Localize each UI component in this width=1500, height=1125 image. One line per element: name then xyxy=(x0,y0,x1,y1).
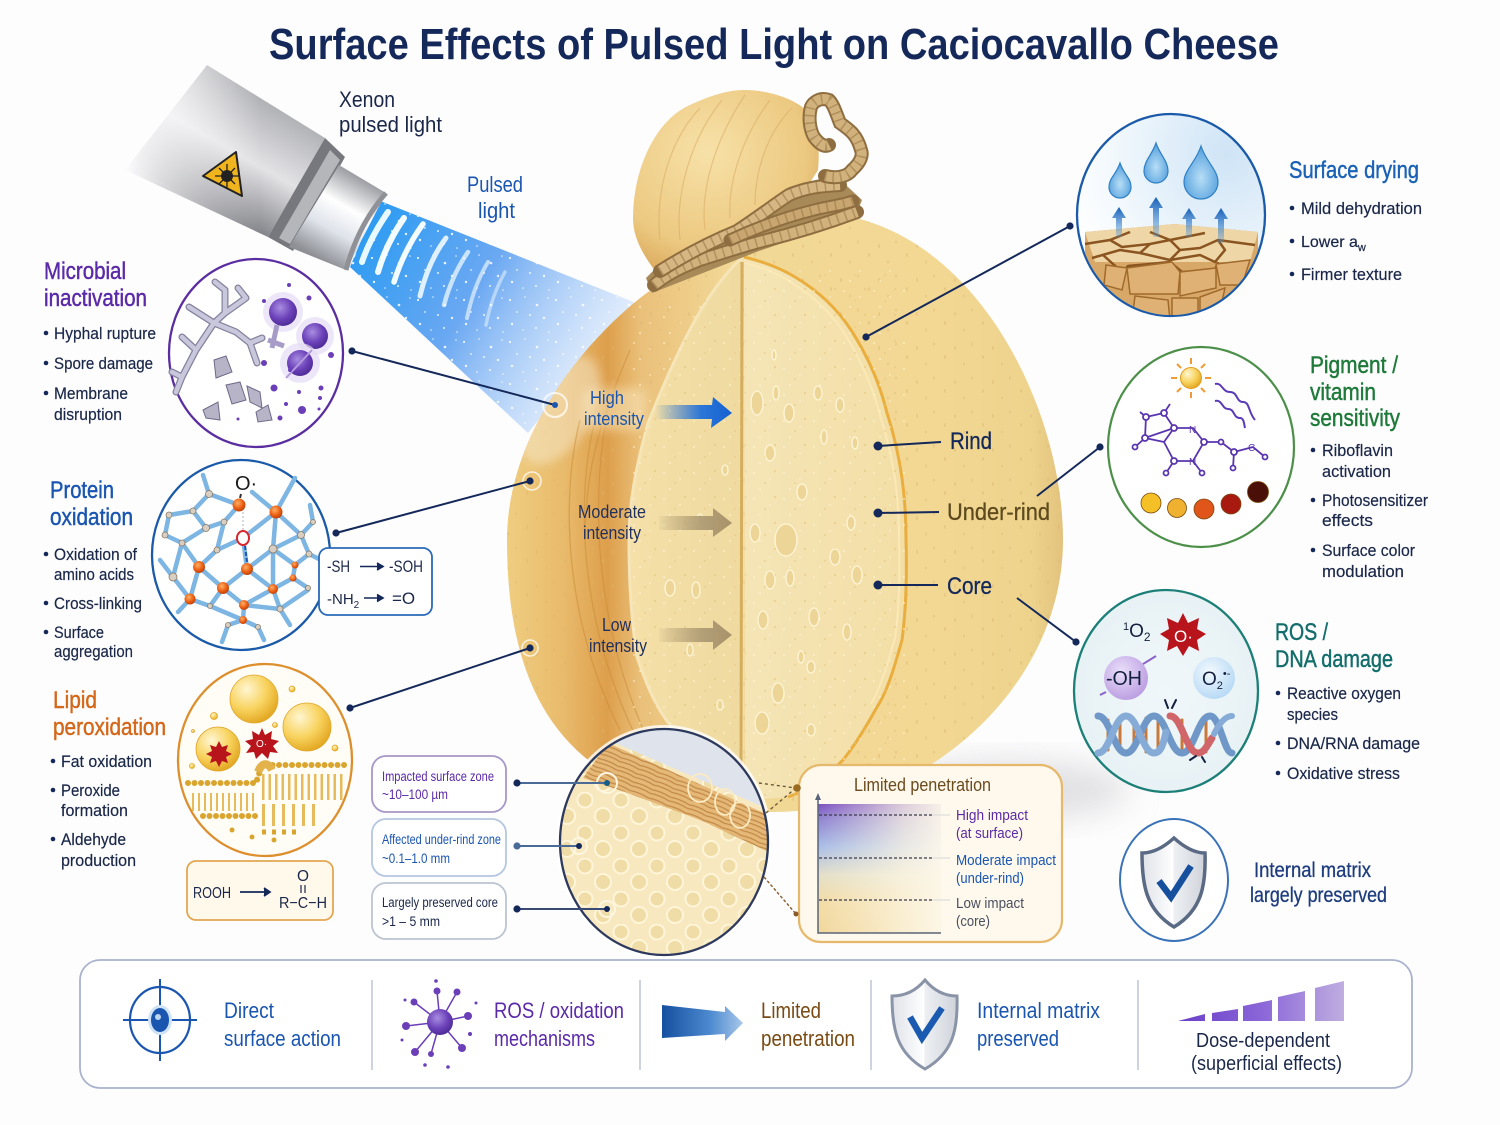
leader line: lipid xyxy=(346,640,538,712)
chemistry box: peroxide to aldehyde: O xyxy=(297,868,309,885)
membrane fragments xyxy=(203,356,272,422)
leader line: surface drying xyxy=(862,222,1074,341)
label: under-rind: Under-rind xyxy=(947,499,1050,526)
panel: lipid peroxidation text: production xyxy=(61,851,136,870)
callout: impacted surface zone: ~10–100 µm xyxy=(382,787,448,802)
panel: lipid peroxidation text: Fat oxidation xyxy=(61,752,152,771)
panel: protein oxidation illustration xyxy=(152,460,330,650)
debris dots xyxy=(236,283,334,420)
panel: ROS and DNA text: Oxidative stress xyxy=(1287,764,1400,783)
singlet oxygen label: 2 xyxy=(1144,630,1151,644)
label: moderate intensity: Moderate xyxy=(578,502,646,522)
label: xenon pulsed light: pulsed light xyxy=(339,112,442,137)
text: ROS oxidation mechanisms: ROS / oxidation xyxy=(494,998,624,1023)
radical star xyxy=(1160,613,1206,656)
chemistry box: thiol and amine: -SH xyxy=(327,557,350,576)
text: limited penetration: penetration xyxy=(761,1026,855,1051)
superoxide: O xyxy=(1202,669,1217,690)
chemistry box: peroxide to aldehyde: R−C−H xyxy=(279,895,327,912)
panel: pigment and vitamin text: Pigment / xyxy=(1310,352,1398,379)
superoxide: •- xyxy=(1223,668,1231,680)
label: internal matrix largely preserved: largely preserved xyxy=(1250,884,1387,907)
text: direct surface action: Direct xyxy=(224,998,274,1023)
panel: microbial inactivation text: Membrane xyxy=(54,384,128,403)
penetration gradient chart xyxy=(815,793,950,933)
summary bar xyxy=(80,960,1412,1088)
text: ROS oxidation mechanisms: mechanisms xyxy=(494,1026,595,1051)
panel: limited penetration xyxy=(799,765,1062,942)
leader line: pigment xyxy=(1037,443,1104,496)
cut face, left xyxy=(629,257,742,790)
label: core xyxy=(874,573,992,600)
caciocavallo cheese xyxy=(500,90,1070,820)
panel: surface drying text: Lower a xyxy=(1301,234,1358,251)
label: xenon pulsed light: Xenon xyxy=(339,87,395,112)
panel: surface drying text: Mild dehydration xyxy=(1301,199,1422,218)
panel: lipid peroxidation text: Peroxide xyxy=(61,781,120,800)
cut face, right xyxy=(744,257,906,800)
zone marker rings xyxy=(571,773,617,917)
lamp body xyxy=(125,65,325,237)
cheese top ball xyxy=(633,90,819,268)
radical stars: O· xyxy=(256,739,267,750)
icon: dose bars xyxy=(1178,981,1344,1021)
label: low intensity: Low xyxy=(602,615,632,635)
lipid bilayer xyxy=(188,764,348,842)
callout: affected under-rind zone xyxy=(372,819,506,876)
panel: pigment and vitamin text: Photosensitizer xyxy=(1322,491,1428,510)
label: moderate intensity xyxy=(578,502,646,543)
oxidised nodes xyxy=(184,498,298,624)
cut seam xyxy=(741,262,742,790)
panel: protein oxidation text xyxy=(44,477,142,661)
rope xyxy=(646,99,862,293)
panel: ROS and DNA text xyxy=(1275,619,1420,783)
text: limited penetration xyxy=(761,998,855,1051)
superoxide xyxy=(1193,657,1235,699)
singlet oxygen label: 1 xyxy=(1123,621,1129,633)
singlet oxygen label: O xyxy=(1129,621,1144,642)
text: direct surface action xyxy=(224,998,341,1051)
label: high intensity: High xyxy=(590,388,624,408)
magnified cross-section lens xyxy=(555,725,775,960)
panel: protein oxidation text: Cross-linking xyxy=(54,594,142,613)
panel: pigment and vitamin text xyxy=(1310,352,1428,581)
text: direct surface action: surface action xyxy=(224,1026,341,1051)
xenon lamp device xyxy=(120,60,386,270)
impact labels: (core) xyxy=(956,914,990,930)
panel: ROS and DNA text: species xyxy=(1287,705,1338,724)
label: internal matrix largely preserved: Internal matrix xyxy=(1254,859,1371,882)
panel: zone callouts xyxy=(372,756,506,939)
label: high intensity: intensity xyxy=(584,409,644,429)
oxygen radical xyxy=(235,473,257,562)
label: under-rind xyxy=(874,499,1050,526)
panel: microbial inactivation text: disruption xyxy=(54,405,122,424)
hydroxyl radical: -OH xyxy=(1106,668,1142,690)
panel: pigment and vitamin text: vitamin xyxy=(1310,379,1376,406)
panel: protein oxidation text: amino acids xyxy=(54,565,134,584)
label: xenon pulsed light xyxy=(339,87,442,137)
icon: penetration arrow xyxy=(662,1005,743,1041)
lamp collar xyxy=(268,138,345,251)
icon: target xyxy=(123,979,197,1061)
label: pulsed light xyxy=(467,172,523,223)
intensity arrow: low xyxy=(659,620,732,650)
panel: pigment and vitamin text: effects xyxy=(1322,511,1373,530)
icon: ROS burst xyxy=(400,979,478,1069)
impact labels: (under-rind) xyxy=(956,871,1024,887)
impact labels: Low impact xyxy=(956,896,1024,912)
rising arrows xyxy=(1112,197,1228,243)
panel: protein oxidation text: Surface xyxy=(54,623,104,642)
callout: affected under-rind zone: Affected under-rind zone xyxy=(382,832,501,847)
impact labels xyxy=(956,808,1056,930)
label: core: Core xyxy=(947,573,992,600)
text: internal matrix preserved: preserved xyxy=(977,1026,1059,1051)
impact labels: High impact xyxy=(956,808,1028,824)
text: ROS oxidation mechanisms xyxy=(494,998,624,1051)
title: Surface Effects of Pulsed Light on Caciocavallo Cheese xyxy=(269,20,1279,69)
cheese holes xyxy=(665,350,862,736)
fungal hyphae xyxy=(172,282,262,392)
text: limited penetration: Limited xyxy=(761,998,821,1023)
panel: surface drying text xyxy=(1289,157,1422,284)
radical star: O· xyxy=(1174,627,1193,646)
label: pulsed light: Pulsed xyxy=(467,172,523,197)
text: internal matrix preserved xyxy=(977,998,1100,1051)
panel: lipid peroxidation illustration xyxy=(178,664,352,856)
icon: shield with check xyxy=(892,980,957,1069)
oxygen radical: O· xyxy=(235,473,257,495)
impact labels: (at surface) xyxy=(956,826,1023,842)
panel: protein oxidation text: Protein xyxy=(50,477,114,504)
callout: largely preserved core: Largely preserved core xyxy=(382,895,498,910)
label: low intensity xyxy=(589,615,647,656)
riboflavin molecule: N xyxy=(1189,457,1196,468)
panel: microbial inactivation text xyxy=(44,258,156,424)
text: internal matrix preserved: Internal matrix xyxy=(977,998,1100,1023)
cheese body xyxy=(507,218,1063,812)
radical stars xyxy=(206,728,279,767)
panel: microbial inactivation text: Hyphal rupture xyxy=(54,324,156,343)
panel: lipid peroxidation text: peroxidation xyxy=(53,714,166,741)
riboflavin molecule: N xyxy=(1189,425,1196,436)
pigment colour spheres xyxy=(1141,482,1268,519)
label: high intensity xyxy=(582,388,646,430)
leader line: protein xyxy=(332,472,541,537)
panel: lipid peroxidation text: Aldehyde xyxy=(61,830,126,849)
callout connector lines xyxy=(759,783,801,916)
riboflavin molecule xyxy=(1132,404,1268,476)
panel: microbial inactivation text: inactivation xyxy=(44,285,147,312)
panel: lipid peroxidation text xyxy=(51,687,166,870)
panel: ROS and DNA illustration xyxy=(1074,590,1258,792)
laser warning icon xyxy=(203,152,242,196)
leader line: ROS xyxy=(1017,598,1080,646)
callout: affected under-rind zone: ~0.1–1.0 mm xyxy=(382,851,450,866)
superoxide: 2 xyxy=(1217,680,1223,692)
chemistry box: thiol and amine: -NH xyxy=(327,591,354,608)
spores xyxy=(263,292,334,383)
panel: ROS and DNA text: DNA damage xyxy=(1275,646,1393,673)
protein network xyxy=(160,475,325,642)
panel: protein oxidation text: Oxidation of xyxy=(54,545,137,564)
panel: protein oxidation text: aggregation xyxy=(54,642,133,661)
chemistry box: thiol and amine: -SOH xyxy=(389,557,423,576)
chemistry box: thiol and amine: 2 xyxy=(354,600,360,611)
badge: internal matrix shield xyxy=(1120,819,1228,941)
panel: pigment and vitamin illustration xyxy=(1108,347,1294,547)
panel: pigment and vitamin text: sensitivity xyxy=(1310,405,1400,432)
leader line: microbial xyxy=(348,347,567,417)
panel: microbial inactivation text: Microbial xyxy=(44,258,126,285)
callout: impacted surface zone xyxy=(372,756,506,812)
dry cracked surface xyxy=(1084,224,1258,315)
text: dose-dependent: (superficial effects) xyxy=(1191,1053,1342,1075)
soft cast shadow xyxy=(890,760,1130,820)
panel: surface drying text: w xyxy=(1357,242,1366,254)
panel: protein oxidation text: oxidation xyxy=(50,504,133,531)
panel: microbial inactivation text: Spore damage xyxy=(54,354,153,373)
panel: ROS and DNA text: DNA/RNA damage xyxy=(1287,734,1420,753)
callout: largely preserved core xyxy=(372,883,506,939)
intensity arrow: moderate xyxy=(659,508,732,537)
panel: surface drying text: Firmer texture xyxy=(1301,265,1402,284)
callout: largely preserved core: >1 – 5 mm xyxy=(382,914,440,929)
chemistry box: thiol and amine xyxy=(319,548,432,615)
light waves xyxy=(1215,384,1255,428)
chemistry box: peroxide to aldehyde xyxy=(187,861,333,920)
label: low intensity: intensity xyxy=(589,636,647,656)
label: pulsed light: light xyxy=(478,198,515,223)
fat globules xyxy=(190,675,338,771)
text: dose-dependent: Dose-dependent xyxy=(1196,1030,1330,1052)
hydroxyl radical xyxy=(1100,656,1156,700)
label: moderate intensity: intensity xyxy=(583,523,641,543)
panel: pigment and vitamin text: activation xyxy=(1322,462,1391,481)
label: rind xyxy=(874,428,992,455)
riboflavin molecule: C xyxy=(1248,443,1255,454)
label: internal matrix largely preserved xyxy=(1250,859,1387,907)
water droplets xyxy=(1109,143,1218,199)
zone leader lines xyxy=(513,779,610,913)
panel: pigment and vitamin text: Surface color xyxy=(1322,541,1415,560)
panel: limited penetration: Limited penetration xyxy=(854,775,991,795)
panel: ROS and DNA text: ROS / xyxy=(1275,619,1328,646)
callout: impacted surface zone: Impacted surface zone xyxy=(382,769,494,784)
chemistry box: peroxide to aldehyde: ROOH xyxy=(193,885,231,902)
panel: surface drying text: Surface drying xyxy=(1289,157,1419,184)
panel: lipid peroxidation text: formation xyxy=(61,801,128,820)
panel: surface drying illustration xyxy=(1077,114,1265,330)
label: rind: Rind xyxy=(950,428,992,455)
impact labels: Moderate impact xyxy=(956,853,1056,869)
panel: lipid peroxidation text: Lipid xyxy=(53,687,97,714)
panel: microbial inactivation illustration xyxy=(169,259,343,447)
intensity arrow: high xyxy=(655,397,732,428)
panel: ROS and DNA text: Reactive oxygen xyxy=(1287,684,1401,703)
panel: pigment and vitamin text: modulation xyxy=(1322,562,1404,581)
DNA helix xyxy=(1098,700,1232,762)
chrome nozzle xyxy=(289,165,386,270)
text: dose-dependent xyxy=(1191,1030,1342,1075)
sun icon xyxy=(1171,358,1211,398)
panel: pigment and vitamin text: Riboflavin xyxy=(1322,441,1393,460)
chemistry box: thiol and amine: =O xyxy=(392,589,415,608)
beam of pulsed light xyxy=(350,200,636,433)
